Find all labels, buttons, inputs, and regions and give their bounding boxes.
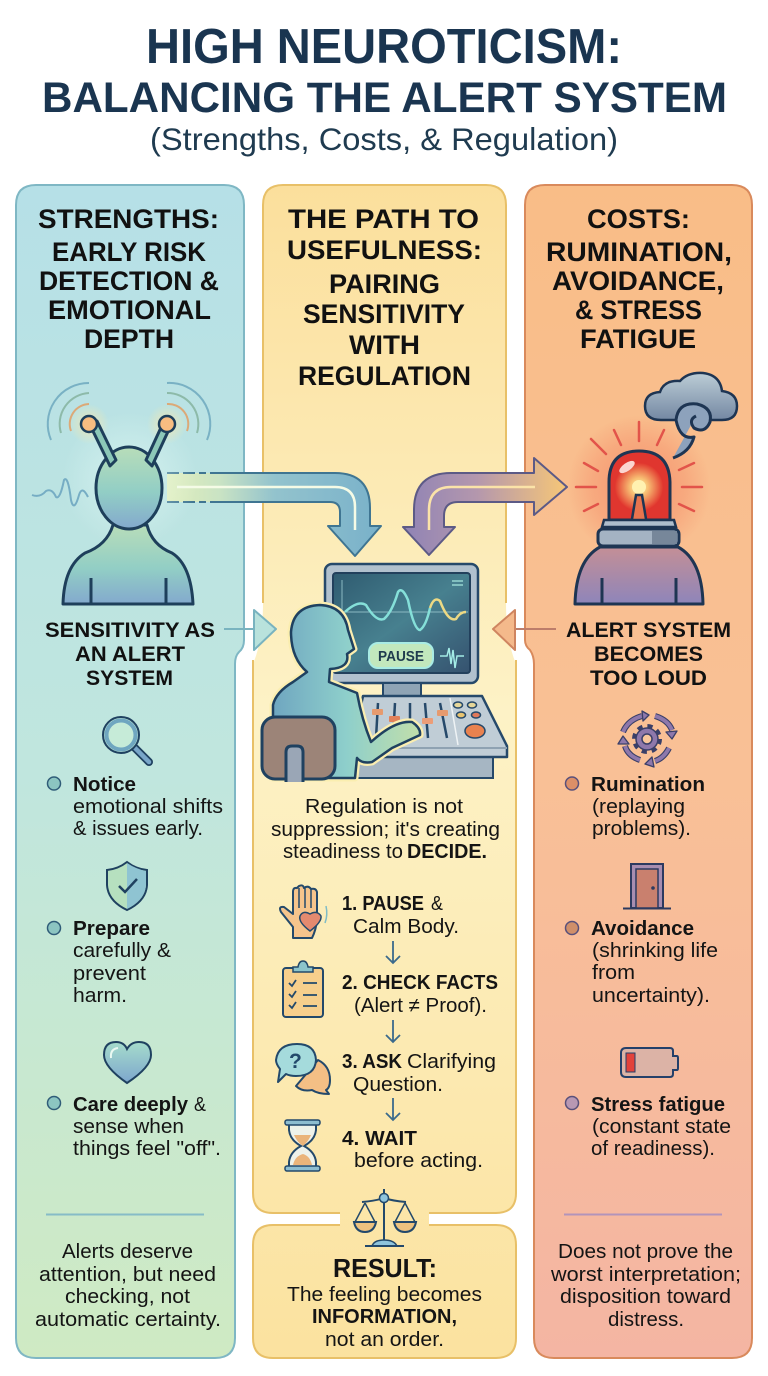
- bullet: rumination: [566, 773, 705, 840]
- step 3: ask: [342, 1050, 496, 1096]
- text: costs caveat: [550, 1240, 741, 1331]
- subheading: sensitivity as an alert system: SYSTEM: [86, 666, 173, 690]
- subheading: alert system becomes too loud: ALERT SYSTEM: [566, 618, 731, 642]
- bullet: avoidance: (shrinking life: [592, 939, 718, 962]
- illustration: person at regulation console: [262, 564, 507, 782]
- text: costs caveat: Does not prove the: [558, 1240, 733, 1263]
- bullet: care deeply: sense when: [73, 1115, 184, 1138]
- title: (Strengths, Costs, & Regulation): [150, 121, 618, 157]
- illustration: person at regulation console: PAUSE: [378, 649, 424, 665]
- arrow: sensitivity into regulation: [224, 610, 276, 650]
- text: regulation definition: [271, 795, 500, 863]
- step 2: check facts: [342, 971, 498, 1017]
- heading: costs: RUMINATION,: [546, 237, 732, 267]
- heading: strengths: DETECTION &: [39, 266, 219, 296]
- bullet: avoidance: [566, 917, 718, 1007]
- heading: path to usefulness: SENSITIVITY: [303, 299, 465, 329]
- bullet: prepare: [48, 917, 171, 1007]
- text: strengths caveat: attention, but need: [39, 1263, 216, 1286]
- bullet: stress fatigue: Stress fatigue: [591, 1093, 725, 1116]
- text: regulation definition: Regulation is not: [305, 795, 463, 818]
- heading: path to usefulness: USEFULNESS:: [287, 235, 482, 265]
- bullet: stress fatigue: (constant state: [592, 1115, 731, 1138]
- heading: path to usefulness: REGULATION: [298, 361, 471, 391]
- arrow: alert into regulation: [493, 610, 556, 650]
- text: costs caveat: distress.: [608, 1308, 684, 1331]
- heading: costs: [546, 204, 732, 354]
- step 2: check facts: (Alert ≠ Proof).: [354, 994, 487, 1017]
- icon: shield: [107, 862, 147, 910]
- icon: clipboard checklist: [283, 961, 323, 1017]
- bullet: avoidance: uncertainty).: [592, 984, 710, 1007]
- bullet: avoidance: Avoidance: [591, 917, 694, 940]
- heading: path to usefulness: WITH: [349, 330, 420, 360]
- panel: costs: [525, 185, 752, 1358]
- step 3: ask: Clarifying: [407, 1050, 496, 1073]
- arrow: regulation to costs and back: [403, 458, 567, 555]
- bullet: rumination: problems).: [592, 817, 691, 840]
- step 4: wait: 4. WAIT: [342, 1127, 417, 1150]
- result text: RESULT:: [333, 1253, 437, 1283]
- heading: path to usefulness: PAIRING: [329, 269, 440, 299]
- bullet: prepare: harm.: [73, 984, 127, 1007]
- title: [42, 20, 727, 157]
- result text: [287, 1253, 482, 1351]
- icon: rumination gear cycle: [618, 711, 677, 767]
- icon: question speech bubbles: [276, 1044, 330, 1094]
- icon: balance scale: [354, 1189, 416, 1246]
- title: HIGH NEUROTICISM:: [146, 20, 622, 74]
- step 1: pause: &: [431, 892, 443, 915]
- step 3: ask: 3. ASK: [342, 1050, 402, 1073]
- text: regulation definition: suppression; it's creating: [271, 818, 500, 841]
- text: strengths caveat: Alerts deserve: [62, 1240, 193, 1263]
- heading: path to usefulness: [287, 204, 482, 391]
- bullet: notice: emotional shifts: [73, 795, 223, 818]
- title: BALANCING THE ALERT SYSTEM: [42, 75, 727, 122]
- panel: path to usefulness: [253, 185, 516, 1358]
- step 1: pause: [342, 892, 459, 938]
- bullet: notice: Notice: [73, 773, 136, 796]
- bullet: rumination: (replaying: [592, 795, 685, 818]
- step 4: wait: before acting.: [354, 1149, 483, 1172]
- heading: costs: AVOIDANCE,: [552, 266, 724, 296]
- result text: not an order.: [325, 1328, 444, 1351]
- subheading: sensitivity as an alert system: SENSITIVITY AS: [45, 618, 215, 642]
- step 1: pause: Calm Body.: [353, 915, 459, 938]
- bullet: care deeply: Care deeply: [73, 1093, 189, 1116]
- icon: heart: [104, 1042, 151, 1083]
- icon: siren on person with storm cloud: [567, 373, 737, 604]
- bullet: care deeply: &: [194, 1093, 206, 1116]
- heading: strengths: STRENGTHS:: [38, 204, 219, 234]
- heading: costs: COSTS:: [587, 204, 690, 234]
- result text: The feeling becomes: [287, 1283, 482, 1306]
- bullet: avoidance: from: [592, 961, 635, 984]
- icon: hourglass: [285, 1120, 320, 1171]
- bullet: prepare: Prepare: [73, 917, 150, 940]
- bullet: prepare: prevent: [73, 962, 146, 985]
- heading: strengths: EARLY RISK: [52, 237, 206, 267]
- step 2: check facts: 2. CHECK FACTS: [342, 971, 498, 994]
- step 4: wait: [342, 1127, 483, 1172]
- text: strengths caveat: checking, not: [65, 1285, 190, 1308]
- icon: door: [623, 864, 671, 908]
- heading: strengths: DEPTH: [84, 324, 174, 354]
- bullet: stress fatigue: [566, 1093, 731, 1160]
- bullet: care deeply: [48, 1093, 221, 1160]
- heading: costs: & STRESS: [575, 295, 702, 325]
- heading: strengths: [38, 204, 219, 354]
- step 3: ask: Question.: [353, 1073, 443, 1096]
- icon: magnifying glass: [103, 717, 149, 762]
- text: strengths caveat: automatic certainty.: [35, 1308, 221, 1331]
- result text: INFORMATION,: [312, 1305, 457, 1328]
- bullet: notice: [48, 773, 223, 840]
- icon: person with antennae: [32, 383, 210, 604]
- panel: strengths: [16, 185, 244, 1358]
- bullet: care deeply: things feel "off".: [73, 1137, 221, 1160]
- subheading: alert system becomes too loud: BECOMES: [594, 642, 703, 666]
- heading: strengths: EMOTIONAL: [48, 295, 211, 325]
- arrow: strengths to regulation: [167, 473, 381, 556]
- text: strengths caveat: [35, 1240, 221, 1331]
- step 1: pause: 1. PAUSE: [342, 892, 424, 915]
- bullet: rumination: Rumination: [591, 773, 705, 796]
- text: costs caveat: worst interpretation;: [550, 1263, 741, 1286]
- text: regulation definition: steadiness to: [283, 840, 403, 863]
- subheading: sensitivity as an alert system: [45, 618, 215, 690]
- bullet: stress fatigue: of readiness).: [591, 1137, 715, 1160]
- subheading: alert system becomes too loud: [566, 618, 731, 690]
- icon: question speech bubbles: ?: [289, 1050, 302, 1073]
- subheading: sensitivity as an alert system: AN ALERT: [75, 642, 185, 666]
- bullet: prepare: carefully &: [73, 939, 171, 962]
- bullet: notice: & issues early.: [73, 817, 203, 840]
- text: costs caveat: disposition toward: [560, 1285, 731, 1308]
- text: regulation definition: DECIDE.: [407, 840, 487, 863]
- heading: costs: FATIGUE: [580, 324, 696, 354]
- icon: low battery: [621, 1048, 678, 1077]
- subheading: alert system becomes too loud: TOO LOUD: [590, 666, 707, 690]
- icon: hand with heart: [280, 885, 327, 938]
- heading: path to usefulness: THE PATH TO: [288, 204, 479, 234]
